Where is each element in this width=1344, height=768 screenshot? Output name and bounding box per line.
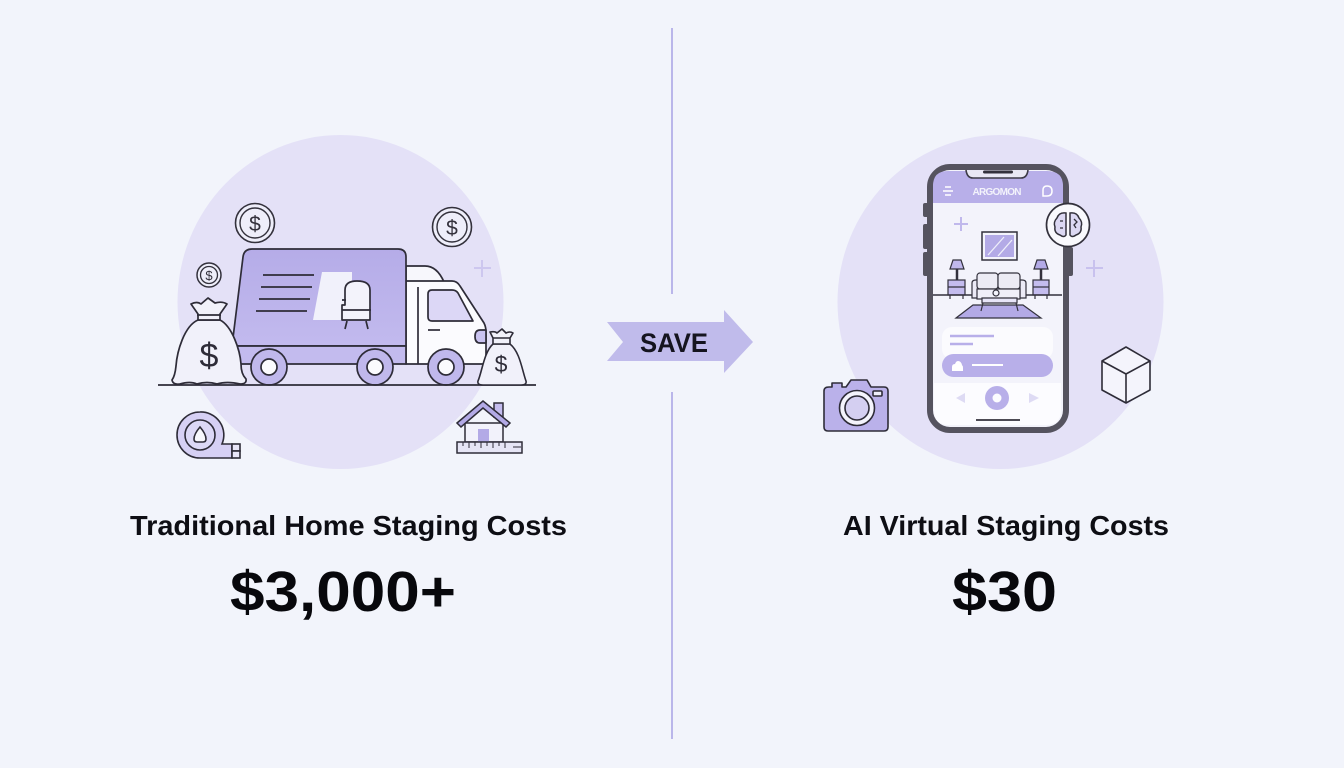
icon: plus right [1086, 260, 1103, 277]
icon: house with ruler [457, 401, 522, 453]
icon: plus left [474, 260, 491, 277]
icon: plus in phone [954, 217, 968, 231]
phone header [933, 170, 1063, 203]
icon: truck [232, 249, 486, 385]
icon: small money bag [478, 329, 526, 385]
icon: camera [824, 380, 888, 431]
panel: AI virtual staging [824, 135, 1169, 624]
price: AI: $30 [952, 560, 1057, 624]
icon: phone [923, 167, 1073, 430]
icon: AI brain badge [1046, 204, 1090, 246]
price: traditional: $3,000+ [230, 560, 456, 624]
ground line [158, 384, 536, 386]
heading: traditional: Traditional Home Staging Costs [130, 510, 567, 541]
icon: coin top left: $ [249, 213, 261, 236]
icon: coin small: $ [205, 268, 213, 283]
icon: cube [1102, 347, 1150, 403]
phone header: ARGOMON [972, 187, 1022, 198]
background circle right [838, 135, 1164, 469]
phone info card [942, 327, 1053, 377]
icon: tape measure [177, 412, 240, 458]
picture frame [982, 232, 1017, 260]
icon: coin top right: $ [446, 217, 458, 240]
arrow label: SAVE [640, 328, 708, 358]
icon: small money bag: $ [495, 351, 508, 377]
background circle left [178, 135, 504, 469]
icon: large money bag [172, 298, 246, 384]
phone controls [934, 383, 1061, 425]
panel: traditional home staging [130, 135, 567, 624]
icon: coin top left [236, 204, 274, 242]
heading: AI: AI Virtual Staging Costs [843, 510, 1169, 541]
arrow: save [607, 310, 753, 373]
divider line [671, 28, 673, 739]
room furniture [933, 260, 1062, 318]
icon: large money bag: $ [200, 337, 219, 375]
icon: coin top right [432, 208, 472, 246]
icon: coin small [197, 263, 221, 287]
